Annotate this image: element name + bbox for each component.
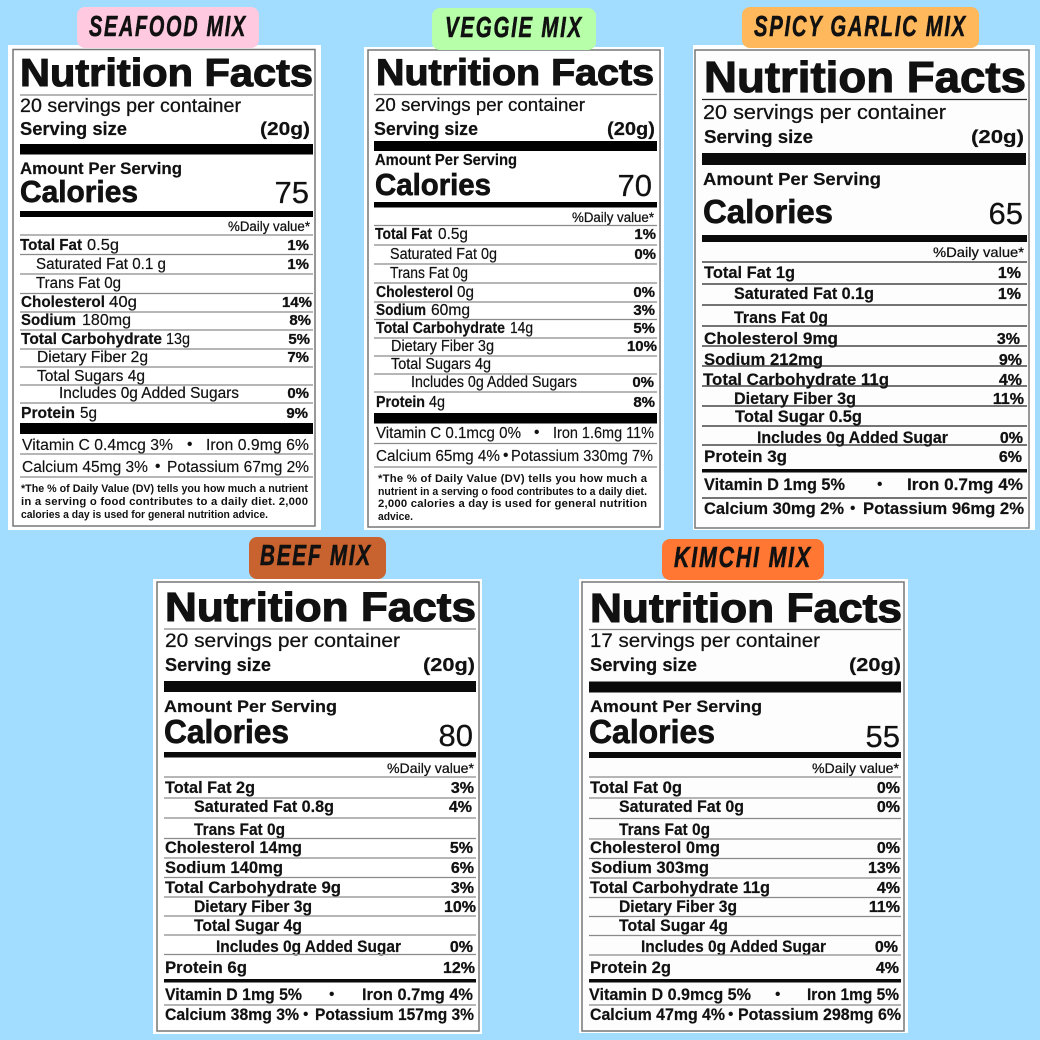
calories: Calories <box>703 193 833 230</box>
footnote: *The % of Daily Value (DV) tells you how much a nutrient <box>21 483 308 495</box>
servings per container: 20 servings per container <box>165 630 401 652</box>
row: added sugar: 0% <box>875 939 898 956</box>
row: sodium <box>704 350 1022 369</box>
row: dietary fiber <box>734 389 1024 408</box>
row: total fat: 1% <box>634 226 656 243</box>
row: cholesterol: Cholesterol 9mg <box>704 329 838 348</box>
daily value header: %Daily value* <box>228 219 311 234</box>
serving size: Serving size <box>374 119 478 139</box>
row: dietary fiber: 11% <box>869 899 900 916</box>
footnote: advice. <box>378 511 413 523</box>
row: vitamin C and iron: Iron 1.6mg 11% <box>553 425 654 442</box>
row: dietary fiber: 10% <box>444 899 476 916</box>
row: protein: Protein <box>376 394 425 411</box>
row: added sugars: 0% <box>287 385 309 402</box>
row: total carbohydrate: 5% <box>633 320 655 337</box>
row: vitamin D and iron <box>165 985 473 1004</box>
title: Nutrition Facts: Nutrition Facts <box>376 52 654 93</box>
row: calcium and potassium: Calcium 45mg 3% <box>22 459 148 476</box>
row: total carbohydrate: Total Carbohydrate 9g <box>165 878 341 897</box>
row: calcium and potassium: Calcium 30mg 2% <box>704 499 844 518</box>
row: vitamin D and iron: Vitamin D 1mg 5% <box>704 475 845 494</box>
row: saturated fat: 1% <box>998 286 1021 303</box>
calories: 75 <box>275 175 309 210</box>
calories <box>703 193 1023 231</box>
row: protein: Protein 6g <box>165 958 247 977</box>
serving size: (20g) <box>260 119 310 139</box>
row: sodium: 8% <box>289 312 311 329</box>
row: protein <box>21 405 308 422</box>
row: total fat: 0% <box>877 780 900 797</box>
row: cholesterol <box>21 294 312 311</box>
calories: 65 <box>989 196 1023 231</box>
row: calcium and potassium <box>590 1005 901 1024</box>
row: saturated fat: Saturated Fat 0g <box>619 797 744 816</box>
row: sodium: Sodium 303mg <box>591 858 709 877</box>
row: sodium <box>591 858 900 877</box>
servings per container: 20 servings per container <box>375 95 585 115</box>
row: vitamin D and iron: Iron 1mg 5% <box>807 985 899 1004</box>
row: cholesterol: Cholesterol 0mg <box>590 838 720 857</box>
row: total fat <box>20 237 309 254</box>
row: cholesterol: 5% <box>450 840 473 857</box>
row: total carbohydrate: 3% <box>451 880 474 897</box>
calories: 70 <box>618 168 652 203</box>
row: total carbohydrate: 5% <box>288 331 310 348</box>
tab: Beef Mix: BEEF MIX <box>260 540 372 572</box>
row: calcium and potassium: Potassium 298mg 6% <box>738 1005 901 1024</box>
serving size: (20g) <box>607 119 655 139</box>
serving size: Serving size <box>704 126 813 147</box>
footnote: 2,000 calories a day is used for general nutrition <box>378 498 647 510</box>
row: added sugars: Includes 0g Added Sugars <box>411 374 577 391</box>
row: saturated fat <box>390 246 656 263</box>
row: sodium: 6% <box>451 860 474 877</box>
row: added sugars: 0% <box>632 374 654 391</box>
row: total sugars: Total Sugars 4g <box>37 368 145 385</box>
tab: Seafood Mix <box>77 7 259 48</box>
row: total fat: Total Fat <box>375 226 432 243</box>
row: protein: 6% <box>999 449 1022 466</box>
row: dietary fiber: 7% <box>287 349 309 366</box>
row: saturated fat: 1% <box>287 256 309 273</box>
row: dietary fiber: Dietary Fiber 3g <box>619 897 737 916</box>
amount per serving: Amount Per Serving <box>375 152 517 169</box>
row: total carbohydrate <box>703 370 1022 389</box>
title: Nutrition Facts: Nutrition Facts <box>590 585 902 631</box>
row: saturated fat: Saturated Fat 0g <box>390 246 497 263</box>
row: calcium and potassium <box>22 458 309 476</box>
row: protein: 4g <box>429 394 445 411</box>
row: vitamin D and iron: Iron 0.7mg 4% <box>362 985 473 1004</box>
row: saturated fat <box>36 256 309 273</box>
calories: 55 <box>866 719 900 754</box>
row: cholesterol <box>590 838 900 857</box>
panel: Spicy Garlic Mix <box>693 7 1035 530</box>
row: total carbohydrate: Total Carbohydrate <box>21 331 162 348</box>
row: calcium and potassium: Potassium 96mg 2% <box>863 499 1024 518</box>
row: total carbohydrate: 4% <box>877 880 900 897</box>
row: protein <box>165 958 475 977</box>
tab: Kimchi Mix <box>662 539 824 580</box>
row: total carbohydrate: 13g <box>166 331 190 348</box>
footnote <box>21 483 308 521</box>
row: vitamin C and iron <box>376 424 654 442</box>
row: cholesterol <box>704 329 1020 348</box>
panel: Kimchi Mix <box>579 539 908 1033</box>
row: calcium and potassium: • <box>303 1006 308 1023</box>
row: protein <box>704 447 1022 466</box>
calories: Calories <box>375 167 491 202</box>
row: cholesterol: 0g <box>457 284 474 301</box>
footnote: *The % of Daily Value (DV) tells you how much a <box>378 473 648 485</box>
row: sodium <box>165 858 474 877</box>
row: cholesterol: 14% <box>282 294 312 311</box>
footnote: nutrient in a serving o food contributes to a daily diet. <box>378 486 647 498</box>
row: vitamin D and iron <box>704 475 1023 494</box>
row: calcium and potassium: Calcium 65mg 4% <box>376 448 500 465</box>
calories: Calories <box>589 713 715 750</box>
tab: Veggie Mix: VEGGIE MIX <box>445 12 583 44</box>
row: total sugar: Total Sugar 4g <box>619 916 728 935</box>
serving size <box>590 655 901 675</box>
row: total fat: Total Fat <box>20 237 82 254</box>
row: trans fat: Trans Fat 0g <box>734 308 828 327</box>
row: saturated fat: Saturated Fat 0.1 g <box>36 256 166 273</box>
row: calcium and potassium: • <box>503 447 508 464</box>
row: calcium and potassium <box>704 499 1024 518</box>
row: protein <box>376 394 655 411</box>
row: protein: 8% <box>633 394 655 411</box>
row: dietary fiber: 11% <box>993 391 1024 408</box>
row: saturated fat: Saturated Fat 0.8g <box>194 797 334 816</box>
row: vitamin C and iron: • <box>534 424 539 441</box>
servings per container: 20 servings per container <box>20 96 242 117</box>
serving size: Serving size <box>20 119 127 139</box>
row: protein: 12% <box>443 960 475 977</box>
calories <box>375 167 652 203</box>
panel: Veggie Mix <box>364 8 664 530</box>
panel: Beef Mix <box>153 537 482 1034</box>
row: total sugar: Total Sugar 0.5g <box>735 407 862 426</box>
row: calcium and potassium: Potassium 330mg 7% <box>511 448 653 465</box>
daily value header: %Daily value* <box>572 210 655 225</box>
serving size: (20g) <box>971 126 1024 147</box>
row: sodium <box>21 312 311 329</box>
row: protein: Protein 3g <box>704 447 787 466</box>
title: Nutrition Facts: Nutrition Facts <box>165 584 476 630</box>
row: total carbohydrate: Total Carbohydrate 11g <box>703 370 889 389</box>
row: dietary fiber <box>619 897 900 916</box>
row: total fat: Total Fat 1g <box>704 263 795 282</box>
row: added sugar: Includes 0g Added Sugar <box>641 937 826 956</box>
row: protein: 9% <box>286 405 308 422</box>
footnote: in a serving o food contributes to a daily diet. 2,000 <box>21 496 308 508</box>
calories <box>164 713 473 753</box>
row: calcium and potassium: • <box>850 500 855 517</box>
row: trans fat: Trans Fat 0g <box>194 820 285 839</box>
row: saturated fat <box>619 797 900 816</box>
serving size <box>20 119 310 139</box>
row: sodium: 13% <box>868 860 900 877</box>
row: vitamin D and iron: • <box>775 986 780 1003</box>
row: vitamin D and iron: Vitamin D 1mg 5% <box>165 985 302 1004</box>
row: calcium and potassium: Potassium 157mg 3% <box>315 1005 474 1024</box>
row: total carbohydrate <box>376 320 655 337</box>
footnote <box>378 473 648 523</box>
amount per serving: Amount Per Serving <box>20 159 182 178</box>
row: saturated fat <box>194 797 472 816</box>
row: added sugar: Includes 0g Added Sugar <box>216 937 401 956</box>
row: dietary fiber: Dietary Fiber 3g <box>734 389 856 408</box>
row: calcium and potassium: • <box>155 458 160 475</box>
servings per container: 20 servings per container <box>703 102 946 124</box>
row: dietary fiber: Dietary Fiber 3g <box>194 897 312 916</box>
row: cholesterol <box>376 284 655 301</box>
row: calcium and potassium: Calcium 47mg 4% <box>590 1005 725 1024</box>
row: vitamin D and iron: • <box>329 986 334 1003</box>
row: cholesterol: Cholesterol <box>21 294 105 311</box>
row: total fat <box>165 778 474 797</box>
row: total sugars: Total Sugars 4g <box>391 356 491 373</box>
tab: Seafood Mix: SEAFOOD MIX <box>89 11 247 43</box>
row: total carbohydrate <box>165 878 474 897</box>
tab: Spicy Garlic Mix <box>742 7 979 48</box>
row: added sugar: Includes 0g Added Sugar <box>757 428 948 447</box>
row: trans fat: Trans Fat 0g <box>619 820 710 839</box>
row: vitamin C and iron: Iron 0.9mg 6% <box>206 437 309 454</box>
row: dietary fiber <box>37 349 309 366</box>
row: dietary fiber: Dietary Fiber 3g <box>391 338 494 355</box>
row: vitamin C and iron: Vitamin C 0.1mcg 0% <box>376 425 521 442</box>
row: saturated fat: 0% <box>877 799 900 816</box>
row: total fat: 1% <box>998 265 1021 282</box>
row: dietary fiber: 10% <box>627 338 657 355</box>
row: protein <box>590 958 899 977</box>
row: protein: Protein 2g <box>590 958 671 977</box>
panel: Seafood Mix <box>8 7 321 530</box>
row: total fat: 0.5g <box>438 226 468 243</box>
row: protein: 5g <box>80 405 97 422</box>
row: calcium and potassium <box>376 447 653 465</box>
row: total carbohydrate: Total Carbohydrate <box>376 320 505 337</box>
row: calcium and potassium <box>165 1005 474 1024</box>
row: cholesterol: Cholesterol <box>376 284 453 301</box>
row: total carbohydrate <box>21 331 310 348</box>
row: cholesterol <box>165 838 473 857</box>
row: cholesterol: 40g <box>109 294 137 311</box>
calories: 80 <box>439 718 473 753</box>
row: calcium and potassium: Potassium 67mg 2% <box>167 459 309 476</box>
row: total fat: Total Fat 2g <box>165 778 255 797</box>
row: protein: 4% <box>876 960 899 977</box>
row: calcium and potassium: Calcium 38mg 3% <box>165 1005 299 1024</box>
servings per container: 17 servings per container <box>590 630 821 652</box>
tab: Beef Mix <box>249 537 386 579</box>
row: saturated fat: Saturated Fat 0.1g <box>734 284 874 303</box>
row: sodium <box>376 302 655 319</box>
row: total fat <box>375 226 656 243</box>
row: cholesterol: Cholesterol 14mg <box>165 838 302 857</box>
daily value header: %Daily value* <box>387 760 475 776</box>
row: vitamin D and iron <box>589 985 899 1004</box>
daily value header: %Daily value* <box>933 244 1025 260</box>
calories: Calories <box>164 713 289 750</box>
calories <box>20 174 309 210</box>
row: saturated fat: 0% <box>634 246 656 263</box>
row: total carbohydrate: Total Carbohydrate 11g <box>590 878 770 897</box>
tab: Veggie Mix <box>432 8 596 50</box>
serving size <box>704 126 1024 147</box>
row: total fat <box>590 778 900 797</box>
serving size: Serving size <box>590 655 697 675</box>
row: sodium: Sodium <box>376 302 426 319</box>
serving size: (20g) <box>849 655 901 675</box>
row: vitamin C and iron: • <box>187 436 192 453</box>
tab: Kimchi Mix: KIMCHI MIX <box>674 542 812 574</box>
amount per serving: Amount Per Serving <box>590 697 762 716</box>
row: dietary fiber <box>391 338 657 355</box>
row: dietary fiber: Dietary Fiber 2g <box>37 349 148 366</box>
row: saturated fat: 4% <box>449 799 472 816</box>
row: total carbohydrate: 14g <box>510 320 533 337</box>
row: total carbohydrate: 4% <box>999 372 1022 389</box>
row: total carbohydrate <box>590 878 900 897</box>
row: added sugar: 0% <box>450 939 473 956</box>
row: vitamin D and iron: Iron 0.7mg 4% <box>907 475 1023 494</box>
row: sodium: Sodium <box>21 312 76 329</box>
row: vitamin D and iron: Vitamin D 0.9mcg 5% <box>589 985 751 1004</box>
row: sodium: 60mg <box>431 302 470 319</box>
row: cholesterol: 3% <box>997 331 1020 348</box>
row: total fat: 1% <box>287 237 309 254</box>
row: total fat: 0.5g <box>87 237 119 254</box>
daily value header: %Daily value* <box>812 760 900 776</box>
row: vitamin D and iron: • <box>877 476 882 493</box>
serving size <box>374 119 655 139</box>
row: added sugar: 0% <box>1000 430 1023 447</box>
row: total fat: 3% <box>451 780 474 797</box>
footnote: calories a day is used for general nutrition advice. <box>21 509 268 521</box>
row: total fat <box>704 263 1021 282</box>
title: Nutrition Facts: Nutrition Facts <box>20 52 313 95</box>
amount per serving: Amount Per Serving <box>703 169 881 189</box>
row: cholesterol: 0% <box>877 840 900 857</box>
serving size: Serving size <box>165 655 271 675</box>
row: sodium: 9% <box>999 352 1022 369</box>
row: cholesterol: 0% <box>633 284 655 301</box>
serving size: (20g) <box>423 655 475 675</box>
row: calcium and potassium: • <box>728 1006 733 1023</box>
row: sodium: 180mg <box>82 312 131 329</box>
row: trans fat: Trans Fat 0g <box>36 275 121 292</box>
row: vitamin C and iron: Vitamin C 0.4mcg 3% <box>22 437 173 454</box>
row: trans fat: Trans Fat 0g <box>390 265 468 282</box>
title: Nutrition Facts: Nutrition Facts <box>704 53 1026 102</box>
row: dietary fiber <box>194 897 476 916</box>
calories <box>589 713 900 754</box>
row: saturated fat <box>734 284 1021 303</box>
row: total fat: Total Fat 0g <box>590 778 682 797</box>
calories: Calories <box>20 174 138 209</box>
row: sodium: Sodium 140mg <box>165 858 283 877</box>
row: added sugars: Includes 0g Added Sugars <box>59 385 239 402</box>
row: protein: Protein <box>21 405 75 422</box>
row: vitamin C and iron <box>22 436 309 454</box>
serving size <box>165 655 475 675</box>
row: sodium: 3% <box>633 302 655 319</box>
row: sodium: Sodium 212mg <box>704 350 823 369</box>
row: total sugar: Total Sugar 4g <box>194 916 302 935</box>
amount per serving: Amount Per Serving <box>164 697 337 716</box>
